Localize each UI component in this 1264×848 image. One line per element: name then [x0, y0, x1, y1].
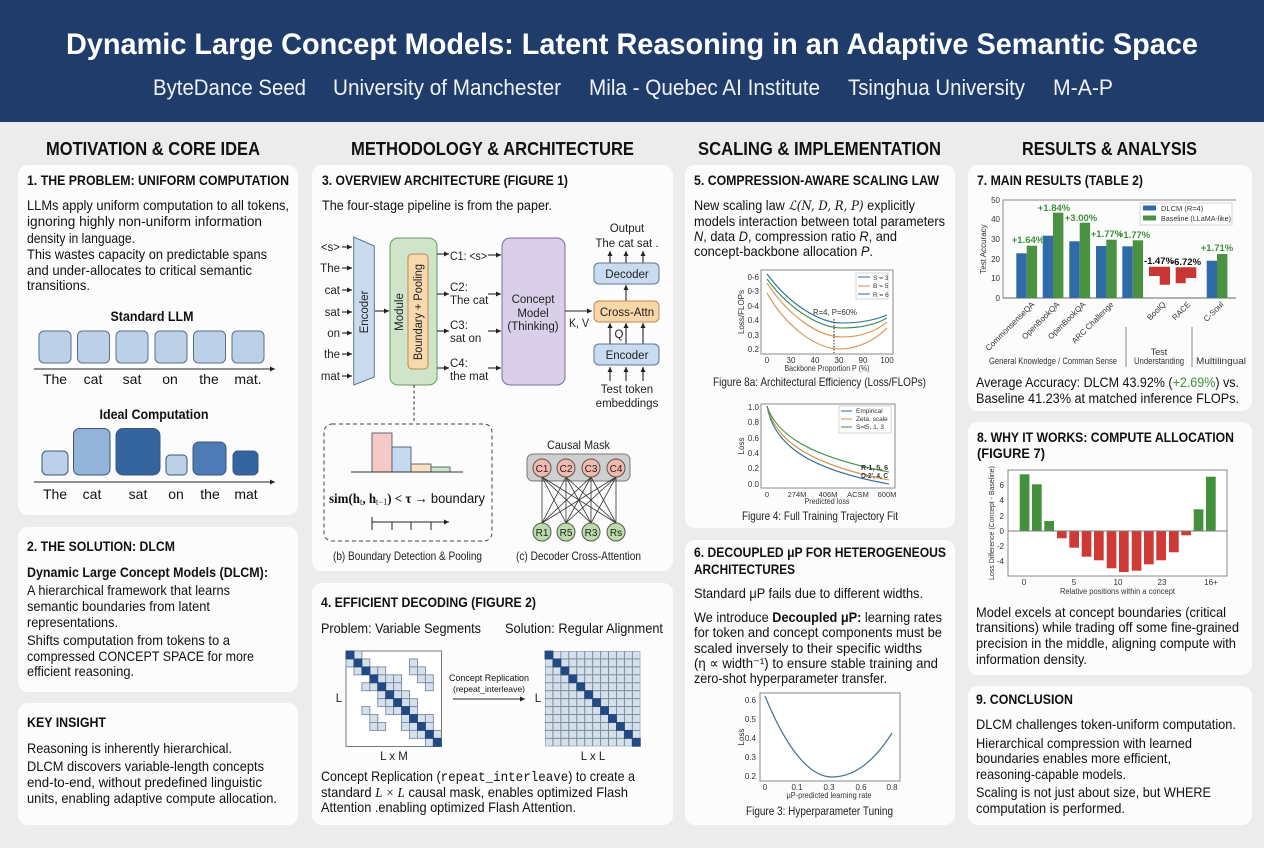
text block: solution description — [27, 564, 268, 679]
decoder stack: embeddings — [596, 398, 659, 410]
concept model block — [502, 238, 565, 385]
legend — [839, 406, 891, 433]
diagram: ideal computation — [34, 406, 275, 502]
concept labels: C4: — [450, 358, 468, 370]
line chart: training trajectory fit — [737, 403, 896, 506]
panel: 9 conclusion — [968, 686, 1252, 825]
input tokens: <s> — [321, 242, 340, 254]
module block — [390, 238, 437, 385]
input tokens — [320, 242, 352, 383]
legend — [1140, 203, 1232, 225]
text block: scaling law — [694, 197, 945, 259]
line chart: hyperparameter tuning: 0.3 — [823, 783, 835, 792]
category labels: Understanding — [1134, 356, 1184, 366]
bar chart: accuracy by dataset: +1.84% — [1038, 203, 1071, 214]
bar chart: accuracy by dataset: 20 — [991, 255, 1001, 264]
bar chart: accuracy by dataset: -6.72% — [1171, 257, 1202, 268]
line chart: training trajectory fit: Loss — [737, 438, 746, 454]
heading: main results: 7. MAIN RESULTS (TABLE 2) — [977, 172, 1143, 188]
text block: scaling law: New scaling law ℒ(N, D, R, P) explicitly — [694, 197, 915, 214]
diagram: standard LLM: The — [43, 371, 67, 387]
line chart: training trajectory fit: 0.6 — [748, 434, 760, 443]
input tokens: sat — [325, 307, 341, 319]
caption: figure 3: Figure 3: Hyperparameter Tuning — [746, 804, 893, 818]
caption: figure 8a: Figure 8a: Architectural Efficiency (Loss/FLOPs) — [713, 375, 926, 389]
legend: DLCM (R=4) — [1161, 204, 1204, 213]
matrix: L x M variable segments — [336, 651, 442, 763]
line chart: architectural efficiency — [737, 270, 894, 373]
panel: 5 compression-aware scaling law — [685, 165, 955, 528]
text block: problem description: transitions. — [27, 277, 90, 293]
bar chart: loss difference by position: Loss Difference (Concept - Baseline) — [987, 466, 996, 580]
panel: 8 why it works — [968, 422, 1252, 675]
text block: concept replication note: Attention .enabling optimized Flash Attention. — [321, 799, 576, 815]
line chart: hyperparameter tuning: 0 — [763, 783, 768, 792]
legend: S=t5, 1, 3 — [856, 424, 884, 431]
concept model block: Model — [517, 308, 549, 320]
line chart: hyperparameter tuning: 0.6 — [855, 783, 867, 792]
output label: The cat sat . — [595, 238, 659, 250]
bar chart: loss difference by position: 0 — [1022, 578, 1027, 587]
panel: key insight — [18, 703, 298, 825]
affiliations: M-A-P — [1053, 75, 1113, 100]
text block: problem description: ignoring highly non-uniform information — [27, 213, 262, 229]
text block: solution description: Dynamic Large Concept Models (DLCM): — [27, 564, 268, 580]
text block: concept replication note: Concept Replication (repeat_interleave) to create a — [321, 768, 635, 786]
module block: Boundary + Pooling — [413, 264, 425, 360]
legend: Zeta, scale — [856, 416, 888, 423]
dataset labels: RACE — [1170, 300, 1192, 322]
diagram: ideal computation: mat — [234, 486, 258, 502]
line chart: training trajectory fit: 600M — [878, 490, 896, 499]
dataset labels: OpenBookQA — [1046, 300, 1088, 341]
bar chart: loss difference by position: 16+ — [1204, 578, 1218, 587]
text block: problem description: This wastes capacity on predictable spans — [27, 246, 267, 262]
concept labels: sat on — [450, 333, 481, 345]
text block: why it works: information density. — [976, 651, 1087, 667]
bar chart: loss difference by position: 5 — [1072, 578, 1077, 587]
legend: R = 6 — [873, 292, 889, 299]
line chart: training trajectory fit: Predicted loss — [804, 497, 850, 506]
diagram: standard LLM: cat — [84, 371, 102, 387]
text block: solution description: A hierarchical framework that learns — [27, 582, 230, 598]
bar chart: accuracy by dataset: +1.77% — [1091, 229, 1124, 240]
diagram: standard LLM: on — [162, 371, 178, 387]
title: Dynamic Large Concept Models: Latent Reasoning in an Adaptive Semantic Space — [66, 28, 1198, 61]
bar chart: loss difference by position: 4 — [1000, 496, 1005, 505]
text block: concept replication note — [321, 768, 635, 815]
text block: decoupled uP: Standard μP fails due to different widths. — [694, 585, 923, 601]
text block: solution description: representations. — [27, 614, 118, 630]
bar chart: loss difference by position: Relative positions within a concept — [1060, 587, 1176, 596]
line chart: architectural efficiency: 0-6 — [747, 273, 760, 282]
line chart: training trajectory fit: 0.2 — [748, 464, 760, 473]
decoder stack: Decoder — [605, 269, 649, 281]
diagram: boundary detection: boundary — [431, 490, 489, 506]
concept labels: the mat — [450, 371, 489, 383]
text block: key insight — [27, 740, 277, 806]
bar chart: loss difference by position: 23 — [1158, 578, 1167, 587]
affiliations: Mila - Quebec AI Institute — [589, 75, 820, 100]
bar chart: accuracy by dataset: 50 — [991, 196, 1001, 205]
text block: conclusion: boundaries enables more efficient, — [976, 750, 1171, 766]
line chart: architectural efficiency: 100 — [880, 356, 894, 365]
affiliations: University of Manchester — [333, 75, 561, 100]
concept labels — [437, 251, 501, 383]
text block: average accuracy: Baseline 41.23% at matched inference FLOPs. — [976, 390, 1239, 406]
affiliations: Tsinghua University — [848, 75, 1025, 100]
text block: decoupled uP: We introduce Decoupled μP: learning rates — [694, 609, 942, 625]
bar chart: loss difference by position: 10 — [1114, 578, 1123, 587]
bar chart: accuracy by dataset: +3.00% — [1065, 213, 1098, 224]
encoder block: Encoder — [359, 290, 371, 333]
text block: decoupled uP: zero-shot hyperparameter transfer. — [694, 670, 887, 686]
diagram: causal mask cross-attention: C4 — [610, 464, 623, 475]
text block: decoupled uP: (η ∝ width⁻¹) to ensure stable training and — [694, 655, 938, 671]
affiliations: ByteDance Seed — [153, 75, 306, 100]
heading: scaling law: 5. COMPRESSION-AWARE SCALING LAW — [694, 172, 940, 188]
text block: why it works: Model excels at concept boundaries (critical — [976, 604, 1226, 620]
heading: key insight: KEY INSIGHT — [27, 714, 106, 730]
matrix: L x L regular alignment — [535, 651, 640, 763]
caption: boundary detection: (b) Boundary Detection & Pooling — [333, 549, 482, 563]
line chart: hyperparameter tuning: Loss — [737, 729, 746, 745]
dataset labels: CommonsenseQA — [984, 300, 1037, 353]
heading: the problem: 1. THE PROBLEM: UNIFORM COMPUTATION — [27, 172, 289, 188]
diagram: standard LLM: Standard LLM — [110, 308, 194, 324]
dataset labels: BoolQ — [1145, 300, 1167, 322]
text block: conclusion: Hierarchical compression with learned — [976, 735, 1192, 751]
output label: Output — [610, 223, 645, 235]
dataset labels: ARC Challenge — [1070, 300, 1116, 345]
heading: conclusion: 9. CONCLUSION — [976, 691, 1073, 707]
text block: decoupled uP: for token and concept components must be — [694, 624, 942, 640]
bar chart: accuracy by dataset: +1.77% — [1118, 230, 1151, 241]
text block: problem description: and under-allocates to critical semantic — [27, 262, 252, 278]
caption: decoder cross-attention: (c) Decoder Cross-Attention — [516, 549, 641, 563]
line chart: training trajectory fit: O-2', 4, C — [861, 471, 888, 480]
concept labels: C2: — [450, 282, 468, 294]
text block: scaling law: models interaction between total parameters — [694, 213, 945, 229]
decoder stack — [594, 251, 659, 410]
column headings: MOTIVATION & CORE IDEA — [46, 139, 260, 159]
text block: conclusion: Scaling is not just about size, but WHERE — [976, 784, 1211, 800]
concept model block: Concept — [512, 294, 555, 306]
line chart: architectural efficiency: 0.3 — [748, 331, 760, 340]
heading: the solution: 2. THE SOLUTION: DLCM — [27, 538, 175, 554]
line chart: architectural efficiency: 0.2 — [748, 345, 760, 354]
matrix: L x L regular alignment: L — [535, 693, 542, 705]
line chart: architectural efficiency: 30 — [787, 356, 796, 365]
bar chart: accuracy by dataset: 10 — [991, 274, 1001, 283]
panel: 7 main results — [968, 165, 1252, 411]
arrow: concept replication: (repeat_interleave) — [453, 684, 525, 694]
text block: why it works: precision in the middle, aligning compute with — [976, 635, 1236, 651]
bar chart: loss difference by position: 0 — [1000, 527, 1005, 536]
line chart: architectural efficiency: 0-3 — [747, 287, 760, 296]
K, V label: K, V — [569, 318, 589, 330]
bar chart: accuracy by dataset: 30 — [991, 235, 1001, 244]
input tokens: on — [327, 328, 340, 340]
line chart: architectural efficiency: 90 — [859, 356, 868, 365]
diagram: four-stage pipeline — [320, 223, 659, 410]
concept labels: The cat — [450, 295, 489, 307]
legend: S = 3 — [873, 275, 889, 282]
diagram: causal mask cross-attention: R1 — [536, 528, 549, 539]
concept model block: (Thinking) — [507, 321, 559, 333]
matrix: L x M variable segments: L x M — [380, 751, 408, 763]
arrow: concept replication — [449, 673, 529, 699]
text block: scaling law: N, data D, compression ratio R, and — [694, 228, 897, 244]
panel: 4 efficient decoding — [312, 583, 673, 825]
text block: solution description: semantic boundaries from latent — [27, 598, 210, 614]
line chart: hyperparameter tuning — [737, 693, 900, 800]
diagram: causal mask cross-attention: R3 — [585, 528, 598, 539]
text block: decoupled uP: scaled inversely to their specific widths — [694, 640, 922, 656]
legend: Empirical — [856, 408, 883, 415]
line chart: training trajectory fit: 274M — [788, 490, 806, 499]
line chart: hyperparameter tuning: 0.3 — [745, 753, 757, 762]
diagram: causal mask cross-attention: R5 — [560, 528, 573, 539]
panel: 6 decoupled uP — [685, 540, 955, 825]
category labels: General Knowledge / Comman Sense — [989, 356, 1117, 366]
bar chart: loss difference by position: -4 — [997, 557, 1005, 566]
text block: average accuracy: Average Accuracy: DLCM 43.92% (+2.69%) vs. — [976, 374, 1239, 390]
diagram: standard LLM: the — [199, 371, 219, 387]
text block: why it works — [976, 604, 1239, 667]
matrix: L x L regular alignment: L x L — [581, 751, 606, 763]
module block: Module — [394, 293, 406, 331]
line chart: training trajectory fit: 0.8 — [748, 418, 760, 427]
diagram: boundary detection: ) < τ → — [387, 492, 431, 507]
decoder stack: Encoder — [606, 350, 649, 362]
panel: 1 the problem — [18, 165, 298, 515]
column headings: RESULTS & ANALYSIS — [1022, 139, 1197, 159]
diagram: causal mask cross-attention: C3 — [585, 464, 598, 475]
line chart: training trajectory fit: R-1, 5, 6 — [861, 463, 888, 472]
line chart: training trajectory fit: 406M — [819, 490, 837, 499]
decoder stack: Q — [615, 329, 624, 341]
line chart: architectural efficiency: 30 — [835, 356, 844, 365]
text block: average accuracy — [976, 374, 1239, 406]
category labels — [989, 327, 1246, 367]
text block: solution description: efficient reasoning. — [27, 663, 134, 679]
category labels: Multilingual — [1196, 356, 1246, 366]
diagram: causal mask cross-attention: C1 — [536, 464, 549, 475]
text block: key insight: Reasoning is inherently hierarchical. — [27, 740, 232, 756]
panel: 2 the solution — [18, 527, 298, 692]
bar chart: accuracy by dataset — [979, 196, 1246, 367]
diagram: boundary detection: t — [360, 497, 363, 507]
text block: key insight: end-to-end, without predefined linguistic — [27, 774, 262, 790]
line chart: hyperparameter tuning: 0.8 — [886, 783, 898, 792]
heading: why it works: 8. WHY IT WORKS: COMPUTE ALLOCATION — [977, 429, 1234, 445]
diagram: ideal computation: sat — [129, 486, 147, 502]
text block: solution description: compressed CONCEPT SPACE for more — [27, 648, 254, 664]
heading: decoupled uP: ARCHITECTURES — [694, 561, 795, 577]
line chart: architectural efficiency: 0.4 — [748, 316, 760, 325]
input tokens: cat — [325, 285, 341, 297]
line chart: hyperparameter tuning: 0.5 — [745, 715, 757, 724]
bar chart: accuracy by dataset: +1.64% — [1012, 235, 1045, 246]
bar chart: loss difference by position — [987, 466, 1227, 596]
diagram: ideal computation: on — [168, 486, 184, 502]
bar chart: accuracy by dataset: -1.47% — [1144, 256, 1175, 267]
column headings — [46, 139, 1197, 159]
panel: 3 overview architecture — [312, 165, 673, 571]
text block: conclusion — [976, 716, 1236, 816]
line chart: training trajectory fit: ACSM — [847, 490, 869, 499]
text block: conclusion: reasoning-capable models. — [976, 766, 1126, 782]
legend: B = 5 — [873, 283, 889, 290]
text block: problem description — [27, 197, 289, 293]
text block: problem description: density in language. — [27, 230, 135, 246]
matrix: L x M variable segments: L — [336, 693, 343, 705]
decoder stack: Cross-Attn — [600, 307, 654, 319]
line chart: architectural efficiency: 40 — [811, 356, 820, 365]
bar chart: accuracy by dataset: Test Accuracy — [979, 224, 988, 274]
affiliations — [153, 75, 1113, 100]
heading: overview architecture: 3. OVERVIEW ARCHITECTURE (FIGURE 1) — [322, 172, 568, 188]
dataset labels: C-Soul — [1202, 300, 1226, 324]
bar chart: loss difference by position: 6 — [1000, 481, 1005, 490]
line chart: hyperparameter tuning: 0.6 — [745, 696, 757, 705]
text block: problem description: LLMs apply uniform computation to all tokens, — [27, 197, 289, 213]
heading: why it works: (FIGURE 7) — [977, 445, 1045, 461]
text block: scaling law: concept-backbone allocation P. — [694, 243, 873, 259]
line chart: training trajectory fit: 0.4 — [748, 449, 760, 458]
text block: concept replication note: standard L × L causal mask, enables optimized Flash — [321, 784, 628, 801]
concept labels: C1: <s> — [450, 251, 487, 263]
diagram: boundary detection: sim(h — [329, 492, 360, 507]
text: pipeline intro: The four-stage pipeline is from the paper. — [322, 197, 552, 213]
diagram: standard LLM: sat — [123, 371, 141, 387]
caption: figure 4: Figure 4: Full Training Trajectory Fit — [742, 509, 899, 523]
encoder block — [354, 237, 374, 385]
bar chart: accuracy by dataset: 0 — [996, 294, 1001, 303]
column headings: METHODOLOGY & ARCHITECTURE — [351, 139, 634, 159]
text block: key insight: DLCM discovers variable-length concepts — [27, 758, 264, 774]
legend: Baseline (LLaMA-like) — [1161, 214, 1231, 223]
dataset labels — [984, 300, 1226, 353]
text block: conclusion: DLCM challenges token-uniform computation. — [976, 716, 1236, 732]
heading: decoupled uP — [694, 544, 946, 577]
diagram: causal mask cross-attention — [527, 438, 630, 541]
diagram: boundary detection: t−1 — [376, 497, 387, 507]
line chart: hyperparameter tuning: 0.1 — [791, 783, 803, 792]
text block: decoupled uP — [694, 585, 942, 686]
heading: efficient decoding: 4. EFFICIENT DECODING (FIGURE 2) — [321, 594, 536, 610]
line chart: architectural efficiency: R=4, P=60% — [813, 308, 857, 317]
bar chart: loss difference by position: 2 — [1000, 512, 1005, 521]
diagram: causal mask cross-attention: Causal Mask — [547, 438, 611, 452]
concept labels: C3: — [450, 320, 468, 332]
diagram: causal mask cross-attention: Rs — [610, 528, 622, 539]
output label — [595, 223, 659, 250]
line chart: training trajectory fit: 1.0 — [748, 403, 760, 412]
legend — [856, 273, 889, 299]
heading: why it works — [977, 429, 1234, 461]
input tokens: mat — [321, 371, 341, 383]
diagram: ideal computation: the — [200, 486, 220, 502]
diagram: boundary detection: , h — [362, 492, 376, 507]
diagram: ideal computation: cat — [83, 486, 101, 502]
line chart: training trajectory fit: 0.0 — [748, 480, 760, 489]
text: problem and solution labels — [321, 620, 663, 636]
bar chart: accuracy by dataset: 40 — [991, 215, 1001, 224]
arrow: concept replication: Concept Replication — [449, 673, 529, 684]
line chart: training trajectory fit: 0 — [765, 490, 769, 499]
line chart: hyperparameter tuning: 0.4 — [745, 734, 757, 743]
text block: why it works: transitions) while trading off some fine-grained — [976, 619, 1239, 635]
line chart: hyperparameter tuning: 0.2 — [745, 772, 757, 781]
text: problem and solution labels: Solution: Regular Alignment — [505, 620, 663, 636]
line chart: architectural efficiency: Backbone Proportion P (%) — [784, 364, 870, 373]
diagram: causal mask cross-attention: C2 — [560, 464, 573, 475]
text block: solution description: Shifts computation from tokens to a — [27, 632, 230, 648]
line chart: hyperparameter tuning: μP-predicted learning rate — [786, 791, 872, 800]
header banner — [0, 0, 1264, 122]
bar chart: accuracy by dataset: +1.71% — [1201, 243, 1234, 254]
line chart: architectural efficiency: 0 — [765, 356, 770, 365]
diagram: boundary detection — [324, 424, 492, 541]
diagram: standard LLM — [34, 308, 275, 387]
diagram: ideal computation: Ideal Computation — [100, 406, 208, 422]
input tokens: The — [320, 263, 340, 275]
text block: key insight: units, enabling adaptive compute allocation. — [27, 790, 277, 806]
category labels: Test — [1151, 347, 1168, 357]
input tokens: the — [324, 349, 340, 361]
dataset labels: OpenBookQA — [1020, 300, 1062, 341]
diagram: standard LLM: mat. — [234, 371, 262, 387]
column headings: SCALING & IMPLEMENTATION — [698, 139, 941, 159]
heading: decoupled uP: 6. DECOUPLED μP FOR HETEROGENEOUS — [694, 544, 946, 560]
decoder stack: Test token — [601, 384, 653, 396]
line chart: architectural efficiency: Loss/FLOPs — [737, 290, 746, 334]
diagram: ideal computation: The — [43, 486, 67, 502]
bar chart: loss difference by position: -2 — [997, 542, 1005, 551]
text: problem and solution labels: Problem: Variable Segments — [321, 620, 481, 636]
text block: conclusion: computation is performed. — [976, 800, 1125, 816]
line chart: architectural efficiency: 0-4 — [747, 302, 760, 311]
